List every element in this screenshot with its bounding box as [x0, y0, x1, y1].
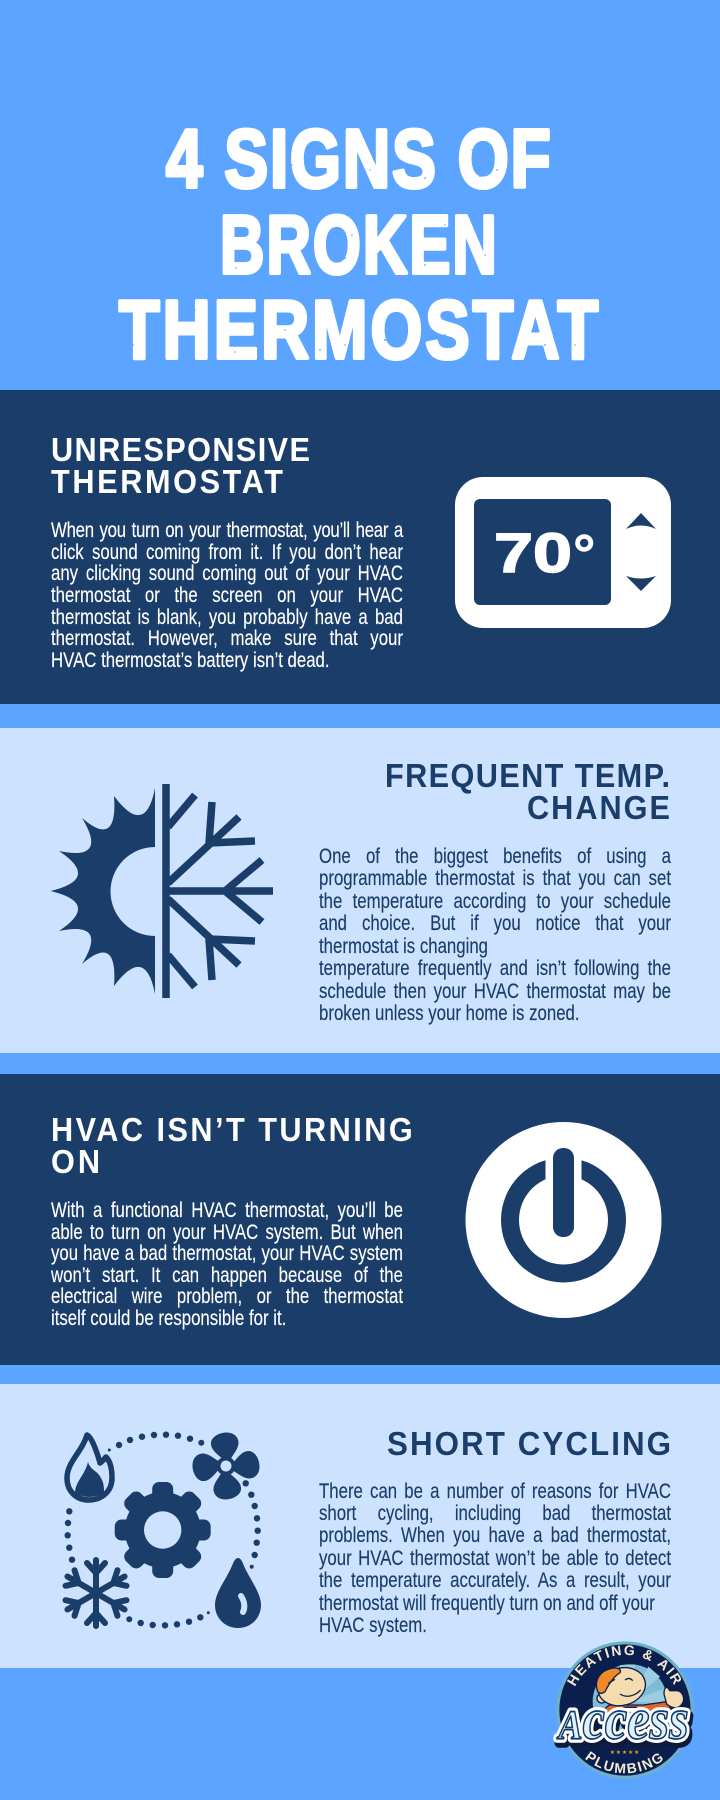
text block: unresponsive thermostat: any clicking sound coming out of your HVAC: [51, 562, 403, 585]
text block: hvac isn't turning on: you have a bad thermostat, your HVAC system: [51, 1242, 403, 1265]
text block: hvac isn't turning on: won’t start. It can happen because of the: [51, 1264, 403, 1287]
heading: frequent temp change: FREQUENT TEMP.: [385, 757, 670, 794]
text block: short cycling: your HVAC thermostat won’t be able to detect: [319, 1547, 671, 1570]
text block: hvac isn't turning on: [50, 1199, 403, 1330]
text block: hvac isn't turning on: With a functional HVAC thermostat, you’ll be: [51, 1199, 403, 1222]
text block: unresponsive thermostat: [51, 519, 404, 672]
text block: frequent temp change: [319, 844, 672, 1025]
text block: hvac isn't turning on: electrical wire problem, or the thermostat: [51, 1285, 403, 1308]
icon: power button: [466, 1122, 662, 1318]
badge text: heating & air: [570, 1655, 680, 1710]
panel: frequent temp change: [0, 728, 720, 1053]
title: BROKEN: [220, 199, 497, 291]
access wordmark: Access: [556, 1687, 689, 1752]
text block: short cycling: [319, 1480, 671, 1637]
stars: ★★★★★: [610, 1749, 640, 1756]
icon: gear: [115, 1482, 211, 1578]
panel: hvac isn't turning on: [0, 1074, 720, 1365]
text block: unresponsive thermostat: HVAC thermostat’s battery isn’t dead.: [51, 649, 330, 672]
logo: Access Heating & Air Plumbing: HEATING & AIR: [567, 1645, 682, 1686]
text block: unresponsive thermostat: When you turn on your thermostat, you’ll hear a: [51, 519, 403, 542]
text block: short cycling: HVAC system.: [319, 1614, 427, 1637]
text block: short cycling: the temperature accurately. As a result, your: [319, 1569, 671, 1592]
logo: Access Heating & Air Plumbing: [553, 1641, 694, 1779]
heading: unresponsive thermostat: THERMOSTAT: [51, 463, 284, 500]
icon: half sun half snowflake: [50, 784, 273, 998]
text block: frequent temp change: One of the biggest benefits of using a: [319, 844, 671, 868]
text block: frequent temp change: temperature frequently and isn’t following the: [319, 957, 671, 980]
icon: thermostat 70 degrees: 70: [494, 521, 572, 584]
heading: hvac isn't turning on: HVAC ISN’T TURNING: [51, 1111, 413, 1148]
panel: short cycling: [0, 1384, 720, 1668]
text block: short cycling: There can be a number of reasons for HVAC: [319, 1480, 671, 1502]
access wordmark: Access: [558, 1691, 691, 1756]
text block: frequent temp change: broken unless your home is zoned.: [319, 1002, 580, 1025]
panel: unresponsive thermostat: [0, 390, 720, 704]
text block: short cycling: problems. When you have a bad thermostat,: [319, 1524, 671, 1547]
heading: unresponsive thermostat: UNRESPONSIVE: [51, 431, 310, 468]
icon: water drop: [215, 1558, 261, 1628]
sky badge: [593, 1664, 667, 1739]
text block: frequent temp change: the temperature according to your schedule: [319, 890, 671, 912]
icon: thermostat 70 degrees: °: [573, 522, 595, 585]
icon: hvac cycle: [62, 1432, 261, 1629]
title: THERMOSTAT: [119, 283, 598, 376]
heading: frequent temp change: CHANGE: [527, 789, 670, 826]
access wordmark: Access: [556, 1687, 689, 1752]
text block: unresponsive thermostat: thermostat or the screen on your HVAC: [51, 584, 403, 607]
text block: frequent temp change: thermostat is changing: [319, 934, 488, 958]
mascot: [594, 1663, 684, 1722]
text block: unresponsive thermostat: thermostat is blank, you probably have a bad: [51, 606, 403, 629]
text block: hvac isn't turning on: able to turn on your HVAC system. But when: [51, 1221, 403, 1244]
heading: unresponsive thermostat: [51, 431, 310, 500]
icon: flame: [67, 1435, 112, 1500]
text block: short cycling: thermostat will frequently turn on and off your: [319, 1592, 655, 1615]
text block: unresponsive thermostat: click sound coming from it. If you don’t hear: [51, 541, 403, 564]
text block: frequent temp change: and choice. But if you notice that your: [319, 912, 671, 935]
text block: hvac isn't turning on: itself could be responsible for it.: [51, 1307, 286, 1330]
dotted cycle ring: [64, 1432, 261, 1629]
icon: thermostat 70 degrees: [455, 477, 671, 628]
text block: short cycling: short cycling, including bad thermostat: [319, 1502, 671, 1525]
badge text: plumbing: [563, 1720, 687, 1773]
logo: Access Heating & Air Plumbing: PLUMBING: [585, 1751, 663, 1774]
heading: hvac isn't turning on: ON: [51, 1143, 100, 1180]
text block: frequent temp change: schedule then your HVAC thermostat may be: [319, 980, 671, 1002]
title: 4 SIGNS OF: [166, 112, 551, 205]
icon: fan: [190, 1430, 262, 1502]
title: [118, 112, 600, 376]
icon: snowflake: [63, 1560, 129, 1626]
text block: unresponsive thermostat: thermostat. However, make sure that your: [51, 627, 403, 650]
heading: frequent temp change: [385, 757, 670, 826]
text block: frequent temp change: programmable thermostat is that you can set: [319, 867, 671, 890]
heading: short cycling: SHORT CYCLING: [387, 1425, 671, 1462]
heading: hvac isn't turning on: [51, 1111, 413, 1180]
